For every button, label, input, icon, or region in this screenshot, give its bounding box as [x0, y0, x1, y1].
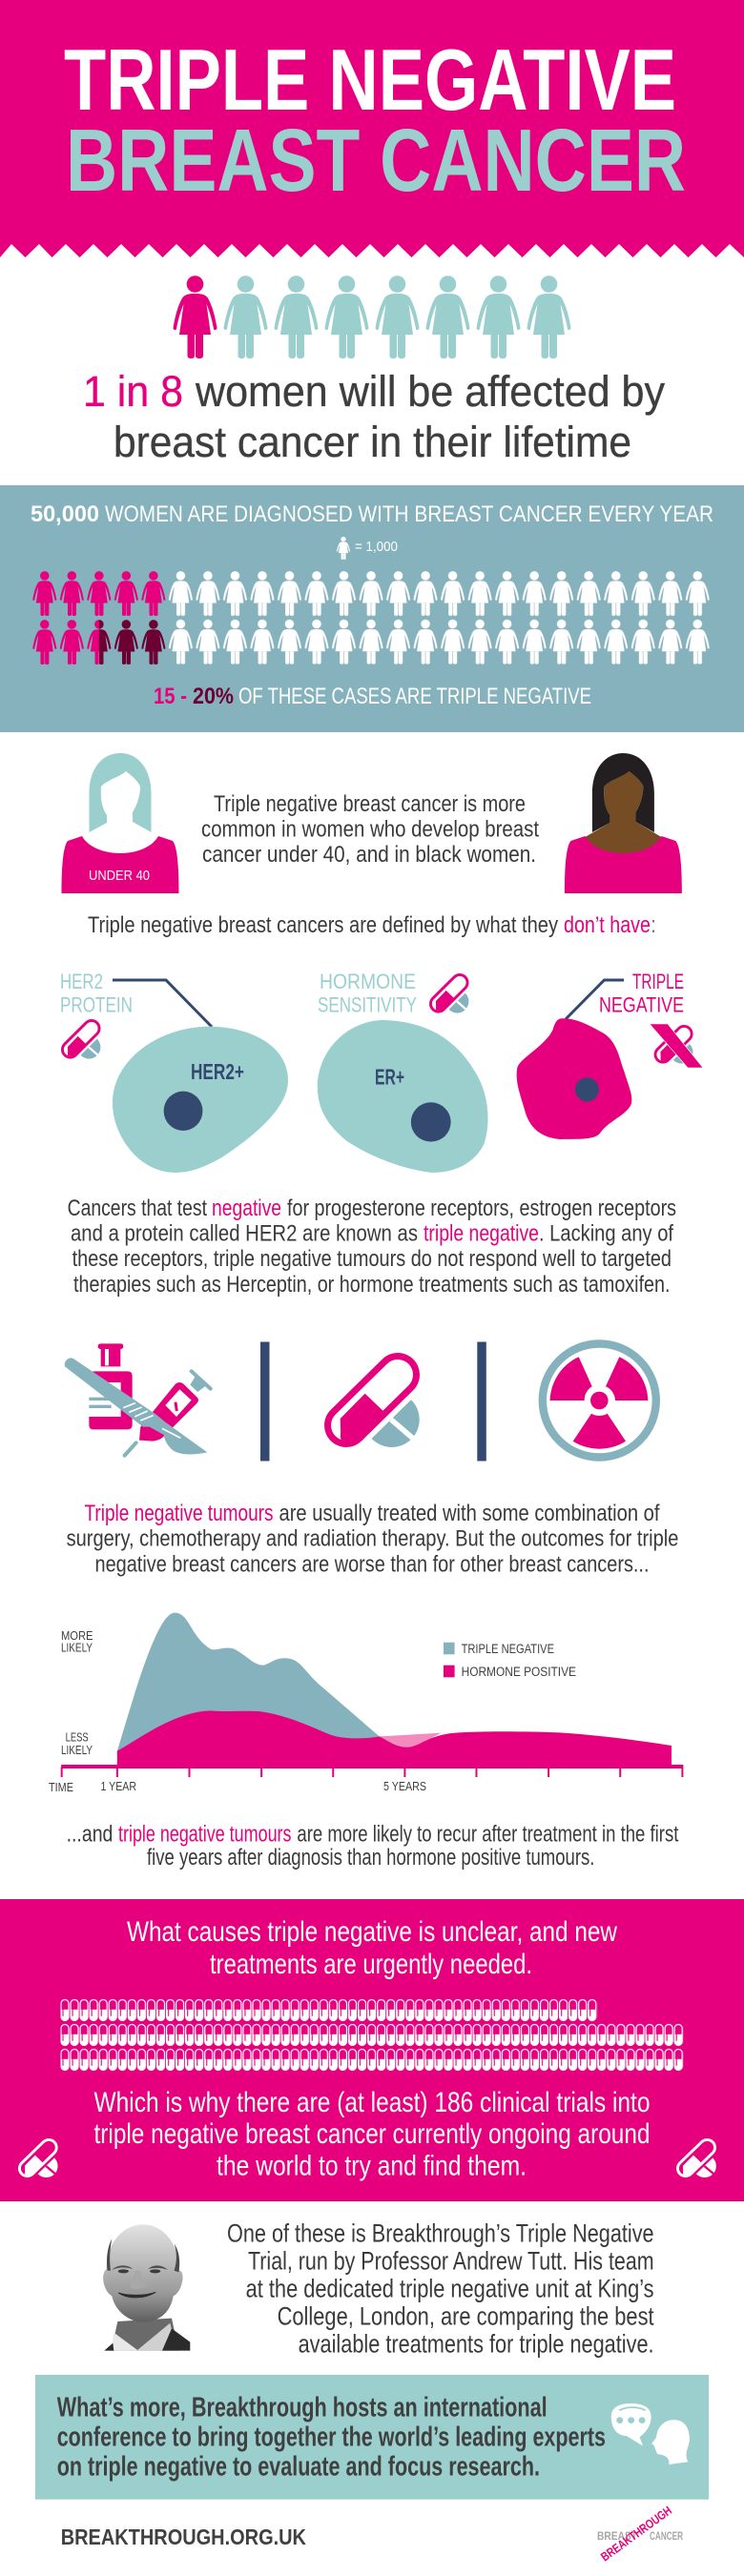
pictogram: 50 women [32, 571, 712, 664]
text: 186 clinical trials: the world to try and find them. [217, 2151, 527, 2182]
text: Breakthrough trial [227, 2219, 654, 2358]
callout text: What’s more, Breakthrough hosts an international [57, 2392, 548, 2423]
186 pills [60, 1999, 684, 2071]
callout text [57, 2392, 606, 2483]
icon: chemotherapy pill [341, 1375, 420, 1447]
cell: HER2 positive [60, 970, 288, 1173]
header banner [0, 0, 744, 257]
cell: triple negative [517, 970, 703, 1139]
axis labels: 1 YEAR [101, 1779, 136, 1793]
heading: causes unclear: What causes triple negative is unclear, and new [127, 1916, 617, 1948]
text: what triple negative means [68, 1196, 676, 1298]
icon: pill [436, 983, 468, 1013]
label: triple negative: TRIPLE [632, 970, 684, 993]
icon: radiation [543, 1344, 656, 1457]
icon: speech bubble and head [611, 2403, 690, 2464]
panel footer: 15-20%: 20% [193, 684, 234, 709]
headline: 1 in 8 women [83, 367, 665, 466]
cell: HER2 positive: HER2+ [191, 1059, 244, 1084]
chart legend: TRIPLE NEGATIVE [462, 1642, 554, 1656]
panel footer: 15-20%: OF THESE CASES ARE TRIPLE NEGATIVE [238, 684, 591, 709]
text: 186 clinical trials [93, 2087, 651, 2182]
heading: defined by what they don't have: don’t have [564, 912, 651, 938]
scalpel [65, 1358, 207, 1454]
callout: conference [35, 2375, 709, 2500]
panel heading: 50,000 [31, 501, 99, 527]
label: HER2 protein: HER2 [60, 970, 103, 993]
text: treatment outcomes: negative breast cancers are worse than for other breast cancers... [95, 1551, 649, 1577]
logo: Breakthrough Breast Cancer: BREAKTHROUGH [598, 2504, 674, 2564]
text: what triple negative means: and a protein called HER2 are known as [71, 1221, 418, 1247]
text: what triple negative means: . Lacking any of [539, 1221, 673, 1247]
label: HER2 protein [60, 970, 133, 1017]
divider [260, 1342, 269, 1461]
axis labels: MORE [61, 1628, 93, 1643]
icon: black woman [565, 753, 682, 893]
axis labels: LIKELY [61, 1743, 93, 1757]
text: treatment outcomes: are usually treated with some combination of [279, 1501, 660, 1526]
chart legend [444, 1642, 576, 1679]
label: HER2 protein: PROTEIN [60, 993, 133, 1017]
one in eight pictogram [174, 276, 570, 358]
logo: Breakthrough Breast Cancer: CANCER [650, 2531, 683, 2543]
heading: causes unclear [127, 1916, 617, 1980]
text: recurrence: ...and [67, 1822, 113, 1848]
pictogram legend [337, 537, 398, 560]
label: triple negative [599, 970, 684, 1017]
text: what triple negative means: Cancers that test [68, 1196, 207, 1221]
pictogram legend: = 1,000 [355, 540, 398, 555]
panel: 50,000 women [0, 485, 744, 732]
text: Breakthrough trial: One of these is Breakthrough’s Triple Negative [227, 2219, 654, 2248]
portrait: Professor Andrew Tutt [103, 2224, 190, 2351]
axis labels [49, 1628, 426, 1794]
headline: 1 in 8 women: 1 in 8 [83, 367, 183, 416]
icon: crossed out pill [650, 1024, 703, 1068]
area chart [61, 1613, 683, 1777]
text: recurrence: five years after diagnosis than hormone positive tumours. [147, 1845, 594, 1871]
label: hormone sensitivity: SENSITIVITY [318, 993, 417, 1017]
label: triple negative: NEGATIVE [599, 993, 684, 1017]
icon: white pill left [25, 2148, 58, 2177]
headline: 1 in 8 women: women will be affected by [195, 367, 665, 416]
syringe [125, 1371, 211, 1456]
heading: defined by what they don't have: : [651, 912, 655, 938]
text: what triple negative means: triple negative [424, 1221, 539, 1247]
icon: white pill right [683, 2148, 716, 2177]
text: more common in younger and black women: cancer under 40, and in black women. [202, 842, 536, 868]
text: recurrence: triple negative tumours [118, 1822, 292, 1848]
website address: BREAKTHROUGH.ORG.UK [61, 2525, 306, 2549]
text: treatment outcomes [67, 1501, 678, 1577]
text: what triple negative means: negative [212, 1196, 281, 1221]
cell: ER positive: ER+ [375, 1065, 404, 1090]
icon: surgery tools [65, 1343, 211, 1456]
panel footer: 15-20% [154, 684, 591, 709]
chart: recurrence over time [49, 1613, 683, 1794]
cell: ER positive [318, 970, 488, 1173]
text: recurrence [67, 1822, 679, 1871]
panel footer: 15-20%: 15 - [154, 684, 187, 709]
axis labels: TIME [49, 1780, 73, 1794]
icon: woman under 40 [61, 753, 179, 893]
text: Breakthrough trial: College, London, are comparing the best [278, 2302, 654, 2331]
divider [477, 1342, 486, 1461]
text: Breakthrough trial: at the dedicated triple negative unit at King’s [246, 2275, 654, 2303]
label: hormone sensitivity: HORMONE [320, 970, 416, 993]
chart legend: HORMONE POSITIVE [462, 1665, 576, 1679]
heading: defined by what they don't have: Triple negative breast cancers are defined by what they [88, 912, 558, 938]
headline: 1 in 8 women: breast cancer in their lifetime [114, 418, 631, 466]
panel: clinical trials [0, 1899, 744, 2201]
text: more common in younger and black women: Triple negative breast cancer is more [214, 791, 526, 817]
text: more common in younger and black women: common in women who develop breast [201, 817, 539, 843]
axis labels: LIKELY [61, 1641, 93, 1655]
heading: causes unclear: treatments are urgently needed. [210, 1949, 532, 1980]
text: treatment outcomes: Triple negative tumours [84, 1501, 273, 1526]
label: under 40: UNDER 40 [89, 868, 150, 884]
axis labels: 5 YEARS [383, 1779, 426, 1793]
callout text: on triple negative to evaluate and focus research. [57, 2452, 540, 2483]
logo: Breakthrough Breast Cancer: BREAST [597, 2531, 637, 2543]
icon: pill [68, 1029, 100, 1059]
text: more common in younger and black women [201, 791, 539, 868]
bottle [89, 1343, 133, 1429]
axis labels: LESS [66, 1730, 89, 1745]
label: hormone sensitivity [318, 970, 417, 1017]
text: Breakthrough trial: available treatments for triple negative. [299, 2329, 654, 2358]
